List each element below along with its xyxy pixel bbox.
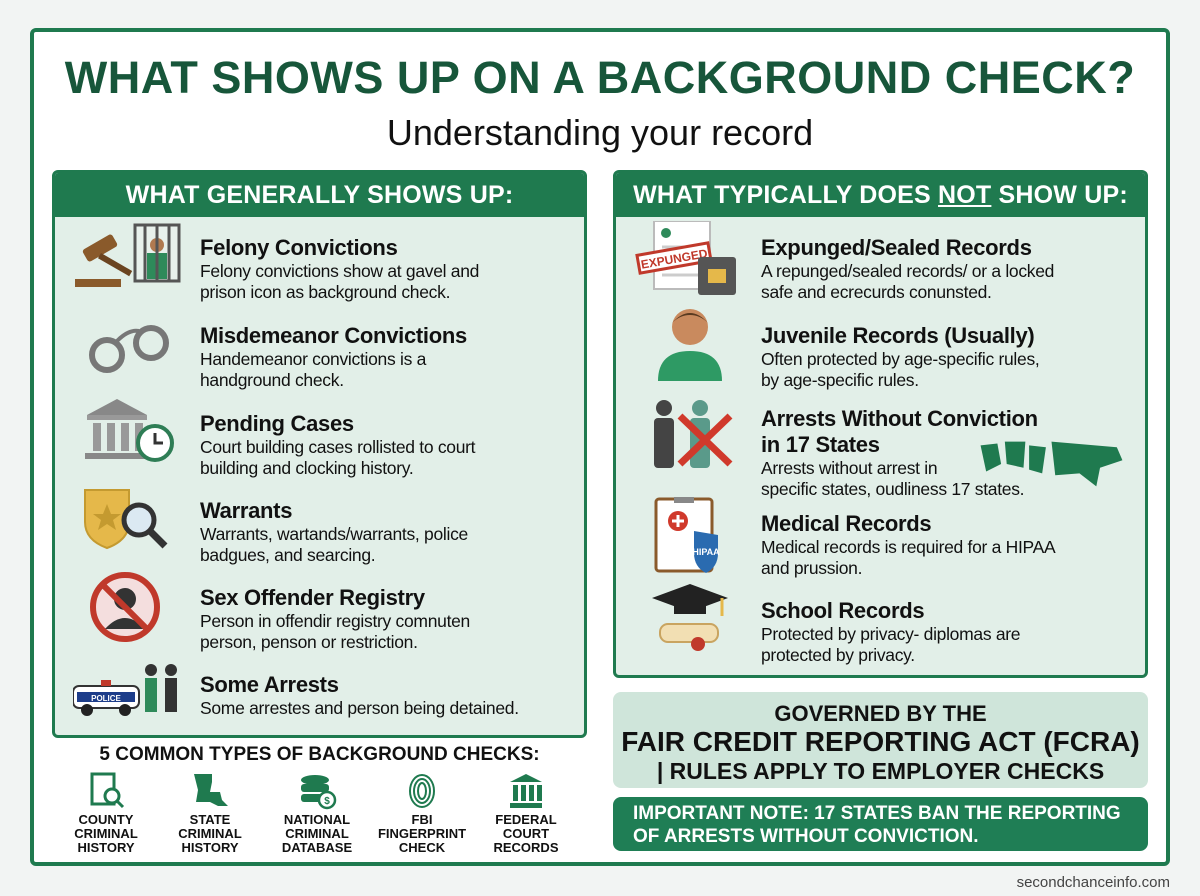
panel: what does not show up: Juvenile Records (Usually) bbox=[761, 323, 1034, 348]
panel: what does not show up: Arrests Without Conviction bbox=[761, 406, 1038, 431]
type: state bbox=[178, 774, 242, 855]
panel: what generally shows up: POLICE bbox=[91, 694, 122, 703]
panel: what generally shows up: Felony convictions show at gavel and bbox=[200, 261, 479, 281]
item: arrests without conviction bbox=[654, 400, 1122, 499]
types row bbox=[74, 772, 558, 855]
type: state: CRIMINAL bbox=[178, 826, 242, 841]
item: medical bbox=[654, 497, 1056, 578]
callout: important note bbox=[613, 797, 1148, 851]
type: county: CRIMINAL bbox=[74, 826, 138, 841]
item: juvenile bbox=[658, 309, 1039, 390]
panel: what generally shows up: person, penson or restriction. bbox=[200, 632, 418, 652]
type: county: COUNTY bbox=[79, 812, 133, 827]
panel: what generally shows up: handground check. bbox=[200, 370, 344, 390]
panel: what does not show up: Medical Records bbox=[761, 511, 931, 536]
subtitle: Understanding your record bbox=[387, 112, 813, 153]
type: national: CRIMINAL bbox=[285, 826, 349, 841]
callout: FCRA bbox=[613, 692, 1148, 788]
callout: FCRA: | RULES APPLY TO EMPLOYER CHECKS bbox=[657, 758, 1104, 784]
panel: what generally shows up: Some arrestes and person being detained. bbox=[200, 698, 519, 718]
item: warrants bbox=[84, 489, 468, 565]
panel: what does not show up: School Records bbox=[761, 598, 924, 623]
callout: FCRA: GOVERNED BY THE bbox=[774, 701, 987, 726]
type: national: $ bbox=[324, 796, 330, 807]
item: felony bbox=[75, 224, 479, 302]
panel: what does not show up: A repunged/sealed records/ or a locked bbox=[761, 261, 1054, 281]
heading: does not show up bbox=[616, 173, 1145, 217]
panel: what does not show up: and prussion. bbox=[761, 558, 862, 578]
type: fbi: FINGERPRINT bbox=[378, 826, 466, 841]
item: expunged bbox=[635, 221, 1054, 302]
panel: what does not show up: HIPAA bbox=[692, 547, 720, 557]
type: state: STATE bbox=[190, 812, 230, 827]
type: federal: FEDERAL bbox=[495, 812, 557, 827]
panel: what does not show up: Arrests without arrest in bbox=[761, 458, 937, 478]
panel: what generally shows up: Court building cases rollisted to court bbox=[200, 437, 475, 457]
heading: does not show up: WHAT TYPICALLY DOES NOT SHOW UP: bbox=[633, 181, 1128, 209]
panel: what generally shows up: Handemeanor convictions is a bbox=[200, 349, 426, 369]
panel: what generally shows up: Felony Convictions bbox=[200, 235, 398, 260]
type: federal bbox=[493, 774, 558, 855]
heading: 5 common types: 5 COMMON TYPES OF BACKGROUND CHECKS: bbox=[99, 744, 540, 765]
panel: what generally shows up: Sex Offender Registry bbox=[200, 585, 425, 610]
heading: shows up bbox=[55, 173, 584, 217]
panel: what generally shows up bbox=[52, 170, 587, 738]
item: misdemeanor bbox=[89, 323, 467, 390]
panel: what does not show up: Medical records is required for a HIPAA bbox=[761, 537, 1055, 557]
footer url: secondchanceinfo.com bbox=[1017, 874, 1170, 891]
type: county: HISTORY bbox=[77, 840, 135, 855]
type: county bbox=[74, 772, 138, 855]
type: federal: COURT bbox=[503, 826, 549, 841]
panel: what generally shows up: building and clocking history. bbox=[200, 458, 413, 478]
panel: what generally shows up: Person in offendir registry comnuten bbox=[200, 611, 470, 631]
type: fbi bbox=[378, 774, 466, 855]
panel: what does not show up bbox=[613, 170, 1148, 678]
panel: what does not show up: EXPUNGED bbox=[640, 246, 709, 272]
type: national: NATIONAL bbox=[284, 812, 350, 827]
item: pending bbox=[85, 399, 476, 478]
heading: shows up: WHAT GENERALLY SHOWS UP: bbox=[126, 181, 513, 209]
item: school bbox=[652, 584, 1020, 665]
type: national bbox=[282, 775, 352, 855]
type: national: DATABASE bbox=[282, 840, 352, 855]
panel: what generally shows up: prison icon as background check. bbox=[200, 282, 450, 302]
panel: what generally shows up: Misdemeanor Convictions bbox=[200, 323, 467, 348]
type: fbi: FBI bbox=[412, 812, 432, 827]
callout: important note: IMPORTANT NOTE: 17 STATES BAN THE REPORTING bbox=[633, 803, 1121, 824]
panel: what generally shows up: badgues, and searcing. bbox=[200, 545, 375, 565]
title: WHAT SHOWS UP ON A BACKGROUND CHECK? bbox=[65, 52, 1135, 103]
panel: what does not show up: Protected by privacy- diplomas are bbox=[761, 624, 1020, 644]
type: fbi: CHECK bbox=[399, 840, 445, 855]
callout: important note: OF ARRESTS WITHOUT CONVICTION. bbox=[633, 826, 979, 847]
callout: FCRA: FAIR CREDIT REPORTING ACT (FCRA) bbox=[621, 726, 1140, 757]
panel: what generally shows up: Warrants, wartands/warrants, police bbox=[200, 524, 468, 544]
panel: what does not show up: in 17 States bbox=[761, 432, 880, 457]
icon: US map bbox=[980, 442, 1122, 486]
item: sex offender bbox=[90, 572, 470, 652]
panel: what does not show up: Expunged/Sealed Records bbox=[761, 235, 1032, 260]
type: federal: RECORDS bbox=[493, 840, 558, 855]
panel: what generally shows up: Some Arrests bbox=[200, 672, 339, 697]
panel: what does not show up: protected by privacy. bbox=[761, 645, 915, 665]
panel: what does not show up: safe and ecrecurds conunsted. bbox=[761, 282, 992, 302]
panel: what does not show up: specific states, oudliness 17 states. bbox=[761, 479, 1024, 499]
item: arrests bbox=[73, 664, 519, 718]
panel: what does not show up: by age-specific rules. bbox=[761, 370, 919, 390]
type: state: HISTORY bbox=[181, 840, 239, 855]
panel: what does not show up: Often protected by age-specific rules, bbox=[761, 349, 1039, 369]
panel: what generally shows up: Pending Cases bbox=[200, 411, 354, 436]
panel: what generally shows up: Warrants bbox=[200, 498, 292, 523]
